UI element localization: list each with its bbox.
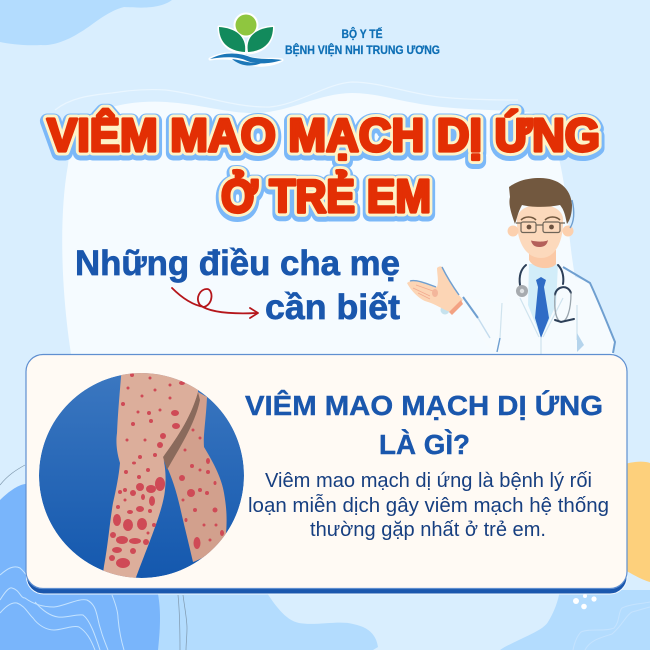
arrow: curly red xyxy=(172,288,258,318)
doctor stethoscope xyxy=(520,265,574,322)
background: faint wave line xyxy=(55,82,518,110)
doctor hand xyxy=(407,266,463,315)
background: orange blob xyxy=(625,462,650,582)
card body text xyxy=(248,470,609,541)
icon: logo sun and leaves xyxy=(210,14,282,66)
card body xyxy=(26,354,627,588)
left leg xyxy=(102,365,198,580)
logo text: BỘ Y TẾ xyxy=(342,28,383,41)
title: VIÊM MAO MẠCH DỊ ỨNG xyxy=(47,111,600,163)
title: VIÊM MAO MẠCH DỊ ỨNG xyxy=(47,109,600,161)
circular photo: rash on legs xyxy=(39,365,244,580)
doctor hair xyxy=(509,178,572,224)
subtitle: cần biết xyxy=(265,288,400,327)
logo text xyxy=(285,28,440,57)
rash spots xyxy=(109,373,224,568)
title: VIÊM MAO MẠCH DỊ ỨNG xyxy=(47,109,600,161)
background: left blue blob xyxy=(0,484,160,650)
doctor head xyxy=(517,204,563,258)
background: bottom medium-blue area xyxy=(150,590,650,650)
card shadow xyxy=(26,360,627,594)
background: wavy lines xyxy=(0,567,650,650)
card heading: LÀ GÌ? xyxy=(379,429,470,460)
title: Ở TRẺ EM xyxy=(221,170,431,222)
right leg xyxy=(162,392,227,562)
title xyxy=(47,109,600,224)
subtitle: Những điều cha mẹ xyxy=(75,244,400,283)
title: Ở TRẺ EM xyxy=(221,172,431,224)
background: white central blob xyxy=(62,93,596,360)
subtitle xyxy=(75,244,400,327)
doctor glasses and eyes xyxy=(516,222,565,232)
card body text: Viêm mao mạch dị ứng là bệnh lý rối xyxy=(265,470,592,492)
background: white dots xyxy=(573,594,597,609)
doctor tie xyxy=(535,277,549,338)
card heading xyxy=(245,390,603,460)
background: top-left blob xyxy=(0,0,172,45)
title: Ở TRẺ EM xyxy=(221,170,431,222)
doctor shirt and neck xyxy=(528,264,558,338)
card body text: thường gặp nhất ở trẻ em. xyxy=(310,519,546,541)
card heading: VIÊM MAO MẠCH DỊ ỨNG xyxy=(245,390,603,421)
card xyxy=(26,354,627,594)
doctor coat xyxy=(463,269,616,356)
card body text: loạn miễn dịch gây viêm mạch hệ thống xyxy=(248,494,609,517)
logo text: BỆNH VIỆN NHI TRUNG ƯƠNG xyxy=(285,42,440,57)
doctor illustration xyxy=(407,178,616,356)
logo xyxy=(210,14,440,66)
